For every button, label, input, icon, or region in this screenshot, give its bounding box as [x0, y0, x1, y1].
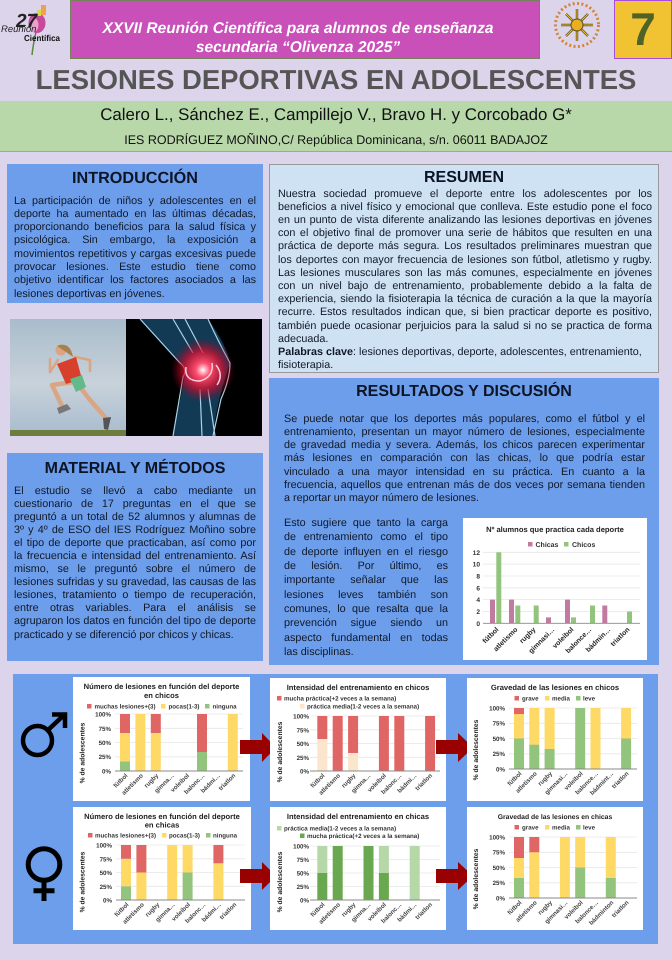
- bar chart: lesiones en chicas: en chicas: [145, 820, 179, 830]
- bar chart: intensidad en chicas: triatlon: [414, 901, 434, 921]
- bar chart: lesiones en chicos: pocas(1-3): [168, 704, 199, 710]
- bar chart: alumnos por deporte: atletismo: [492, 626, 519, 653]
- image: runner: [10, 319, 126, 436]
- bar chart: gravedad en chicos: bádmint…: [589, 770, 615, 797]
- bar chart: alumnos por deporte: Chicos: [572, 541, 595, 549]
- bar chart: lesiones en chicas: rugby: [144, 901, 162, 919]
- bar chart: intensidad en chicas: balonc…: [380, 901, 403, 925]
- bar chart: gravedad en chicas: bádminton: [588, 899, 615, 927]
- bar chart: gravedad en chicas: atletismo: [515, 899, 539, 924]
- bar chart: gravedad en chicas: 75%: [493, 850, 505, 856]
- bar chart: gravedad en chicos: triatlon: [611, 770, 631, 790]
- bar chart: gravedad en chicas: fútbol: [506, 899, 524, 917]
- bar chart: gravedad en chicas: % de adolescentes: [473, 848, 480, 909]
- bar chart: gravedad en chicos: balonce…: [574, 770, 600, 796]
- bar chart: alumnos por deporte: Chicas: [536, 541, 559, 549]
- text: adecuada.: [278, 333, 328, 345]
- text: vinculado a una mayor intensidad en su práctica. En cuanto a la: [284, 466, 645, 478]
- bar chart: intensidad en chicos: Intensidad del entrenamiento en chicos: [287, 683, 429, 692]
- bar chart: gravedad en chicas: 50%: [493, 865, 505, 872]
- bar chart: intensidad en chicos: fútbol: [309, 772, 327, 790]
- bar chart: gravedad en chicos: Gravedad de las lesiones en chicos: [491, 683, 619, 692]
- text: frecuencia, aquellos que entrenan más de dos veces por semana tienden: [284, 479, 645, 491]
- text: preguntó a un total de 52 alumnos y alumnas de: [14, 511, 256, 523]
- text: lesiones, tratamiento o tiempo de recuperación,: [14, 589, 256, 601]
- panel: introducción: [7, 164, 263, 303]
- header banner: secundaria “Olivenza 2025”: [196, 39, 400, 56]
- image: knee x-ray: [126, 319, 262, 436]
- bar chart: gravedad en chicas: leve: [583, 824, 596, 832]
- bar chart: lesiones en chicas: fútbol: [113, 901, 131, 919]
- bar chart: lesiones en chicos: gimna…: [153, 772, 176, 795]
- poster number: [614, 0, 672, 59]
- text: La participación de niños y adolescentes en el: [14, 195, 256, 207]
- bar chart: alumnos por deporte: voleibol: [551, 626, 575, 650]
- bar chart: lesiones en chicas: 100%: [96, 842, 112, 850]
- bar chart: intensidad en chicas: voleibol: [366, 901, 388, 923]
- bar chart: intensidad en chicas: % de adolescentes: [277, 851, 284, 912]
- text: de entrenamiento como el tipo: [284, 531, 448, 543]
- bar chart: lesiones en chicos: triatlon: [217, 772, 237, 792]
- text: más lesiones en comparación con las chicas, lo que podría estar: [284, 452, 645, 464]
- text: El estudio se llevó a cabo mediante un: [14, 485, 256, 497]
- bar chart: gravedad en chicos: leve: [583, 696, 596, 702]
- bar chart: gravedad en chicos: atletismo: [515, 770, 539, 795]
- arrow: [240, 862, 276, 890]
- text: objetivo identificar los factores asociados a las: [14, 274, 256, 286]
- bar chart: intensidad en chicas: gimna…: [350, 901, 372, 924]
- text: práctica de deporte más segura. Los resultados preliminares muestran que: [278, 240, 652, 252]
- text: [14, 485, 256, 641]
- bar chart: alumnos por deporte: [463, 518, 647, 660]
- bar chart: lesiones en chicas: [73, 807, 251, 930]
- bar chart: intensidad en chicos: rugby: [340, 772, 358, 790]
- bar chart: alumnos por deporte: 4: [476, 597, 480, 604]
- bar chart: gravedad en chicos: 50%: [493, 736, 505, 743]
- bar chart: lesiones en chicas: gimna…: [154, 901, 177, 924]
- text: [278, 188, 652, 371]
- bar chart: intensidad en chicos: 50%: [297, 741, 309, 748]
- panel: resumen: [269, 164, 659, 373]
- bar chart: lesiones en chicos: bádmi…: [200, 772, 222, 795]
- text: provocar lesiones. Este estudio tiene como: [14, 261, 256, 273]
- bar chart: intensidad en chicas: 75%: [297, 857, 309, 864]
- bar chart: gravedad en chicos: rugby: [537, 770, 554, 788]
- arrow: [436, 862, 473, 890]
- text: Esto sugiere que tanto la carga: [284, 517, 448, 529]
- text: también puede ocasionar perjuicios para la salud si no se practica de forma: [278, 320, 652, 332]
- authors: Calero L., Sánchez E., Campillejo V., Bravo H. y Corcobado G*: [100, 105, 572, 124]
- text: de deporte influyen en el riesgo: [284, 546, 448, 558]
- text: la frecuencia e intensidad del entrenamiento. Así: [14, 550, 256, 562]
- text: Nuestra sociedad promueve el deporte entre los adolescentes por los: [278, 188, 652, 200]
- bar chart: alumnos por deporte: 0: [476, 621, 480, 628]
- heading: MATERIAL Y MÉTODOS: [45, 460, 225, 477]
- authors band: [0, 101, 672, 152]
- bar chart: gravedad en chicos: 100%: [489, 706, 505, 712]
- bar chart: lesiones en chicas: balonc…: [184, 901, 207, 925]
- header banner: [70, 0, 540, 59]
- text: recurre. Estos resultados indican que, si bien practicar deporte es positivo,: [278, 306, 652, 318]
- bar chart: lesiones en chicos: fútbol: [112, 772, 130, 790]
- bar chart: intensidad en chicos: triatlon: [414, 772, 434, 792]
- bar chart: alumnos por deporte: triatlon: [609, 626, 631, 648]
- bar chart: intensidad en chicas: bádmi…: [396, 901, 418, 924]
- bar chart: lesiones en chicas: atletismo: [122, 901, 146, 926]
- icon: male symbol: [23, 714, 65, 755]
- logo: 27 Reunión Científica: Científica: [24, 33, 60, 43]
- text: [284, 413, 645, 504]
- bar chart: lesiones en chicas: 25%: [100, 884, 112, 891]
- bar chart: lesiones en chicos: [73, 677, 250, 801]
- bar chart: lesiones en chicos: 100%: [95, 712, 111, 718]
- text: de lesión. Por último, es: [284, 560, 448, 572]
- bar chart: gravedad en chicas: grave: [522, 824, 539, 832]
- text: los deportes con mayor frecuencia de lesiones son fútbol, atletismo y rugby.: [278, 254, 652, 266]
- text: Las lesiones musculares son las más comunes, especialmente en jóvenes: [278, 267, 652, 279]
- bar chart: lesiones en chicas: muchas lesiones+(3): [95, 832, 156, 840]
- text: Palabras clave: lesiones deportivas, deporte, adolescentes, entrenamiento,: [278, 346, 642, 358]
- bar chart: gravedad en chicas: voleibol: [563, 899, 585, 921]
- logo: sun emblem: [554, 2, 600, 48]
- text: proporcionando beneficios para la salud física y: [14, 221, 256, 233]
- bar chart: lesiones en chicos: 75%: [99, 726, 111, 733]
- bar chart: gravedad en chicos: grave: [522, 696, 539, 702]
- bar chart: intensidad en chicas: 25%: [297, 884, 309, 891]
- heading: INTRODUCCIÓN: [72, 169, 198, 187]
- bar chart: alumnos por deporte: rugby: [518, 626, 537, 645]
- bar chart: lesiones en chicos: % de adolescentes: [80, 722, 86, 783]
- arrow: [436, 733, 473, 762]
- bar chart: intensidad en chicos: 0%: [300, 768, 309, 776]
- text: movimientos repetitivos y cargas excesivas puede: [14, 248, 256, 260]
- bar chart: intensidad en chicas: 0%: [300, 898, 309, 904]
- bar chart: intensidad en chicas: atletismo: [318, 901, 342, 926]
- bar chart: lesiones en chicas: triatlon: [218, 901, 238, 921]
- bar chart: alumnos por deporte: fútbol: [481, 626, 500, 645]
- text: practicado y se diferenció por chicos y chicas.: [14, 629, 234, 641]
- panel: charts background: [13, 674, 658, 944]
- bar chart: alumnos por deporte: 10: [473, 562, 480, 568]
- text: [14, 195, 256, 300]
- bar chart: intensidad en chicas: [270, 807, 446, 930]
- bar chart: intensidad en chicos: gimna…: [350, 772, 372, 795]
- text: lesiones sufridas y su gravedad, las causas de las: [14, 576, 256, 588]
- text: de gravedad media y severa. Además, los chicos parecen experimentar: [284, 439, 645, 451]
- institution: IES RODRÍGUEZ MOÑINO,C/ República Dominicana, s/n. 06011 BADAJOZ: [124, 133, 548, 147]
- bar chart: intensidad en chicos: % de adolescentes: [277, 721, 284, 782]
- bar chart: gravedad en chicos: 25%: [493, 751, 505, 758]
- panel: material y métodos: [7, 453, 263, 661]
- text: en un punto de vista diferente analizando las lesiones deportivas en jóvenes: [278, 214, 652, 226]
- panel: resultados y discusión: [269, 378, 659, 665]
- bar chart: gravedad en chicos: 0%: [496, 766, 505, 774]
- bar chart: lesiones en chicos: rugby: [143, 772, 161, 790]
- bar chart: lesiones en chicas: 50%: [100, 870, 112, 877]
- text: lesiones leves también son: [284, 589, 448, 601]
- bar chart: gravedad en chicos: % de adolescentes: [473, 719, 480, 780]
- bar chart: lesiones en chicos: 25%: [99, 754, 111, 761]
- text: con el objetivo final de promover una serie de hábitos que resulten en una: [278, 227, 652, 239]
- logo: 27 Reunión Científica: [1, 5, 60, 56]
- bar chart: lesiones en chicos: ninguna: [212, 704, 237, 710]
- bar chart: lesiones en chicas: pocas(1-3): [169, 832, 200, 840]
- text: a reportar un mayor número de lesiones.: [284, 492, 479, 504]
- bar chart: gravedad en chicos: voleibol: [563, 770, 585, 792]
- bar chart: alumnos por deporte: bádmin…: [584, 626, 612, 654]
- bar chart: intensidad en chicas: 100%: [293, 844, 309, 850]
- bar chart: intensidad en chicas: 50%: [297, 870, 309, 878]
- bar chart: lesiones en chicas: bádmi…: [201, 901, 223, 924]
- bar chart: lesiones en chicos: en chicos: [144, 691, 179, 700]
- text: [284, 517, 448, 658]
- heading: RESUMEN: [424, 169, 504, 186]
- bar chart: intensidad en chicos: mucha práctica(+2 veces a la semana): [284, 696, 396, 702]
- text: las disciplinas.: [284, 646, 354, 658]
- bar chart: lesiones en chicos: 50%: [99, 740, 111, 747]
- heading: RESULTADOS Y DISCUSIÓN: [356, 383, 572, 400]
- bar chart: intensidad en chicos: balonc…: [380, 772, 403, 796]
- logo: 27 Reunión Científica: Reunión: [1, 24, 36, 35]
- text: comunes, lo que resalta que la: [284, 603, 448, 615]
- bar chart: alumnos por deporte: 12: [473, 550, 480, 557]
- bar chart: lesiones en chicas: % de adolescentes: [80, 851, 86, 912]
- bar chart: lesiones en chicos: muchas lesiones+(3): [94, 704, 156, 710]
- bar chart: intensidad en chicas: Intensidad del entrenamiento en chicas: [287, 812, 429, 821]
- bar chart: gravedad en chicos: media: [552, 696, 570, 702]
- arrow: [240, 733, 276, 762]
- text: beneficios a nivel físico y emocional que conlleva. Este estudio pone el foco: [278, 201, 652, 213]
- bar chart: intensidad en chicos: práctica media(1-2 veces a la semana): [307, 704, 419, 710]
- bar chart: gravedad en chicas: 0%: [496, 896, 505, 902]
- bar chart: intensidad en chicas: fútbol: [309, 901, 327, 919]
- bar chart: alumnos por deporte: 2: [476, 609, 480, 616]
- text: entrenamiento, presentan un mayor número de lesiones, especialmente: [284, 426, 645, 438]
- bar chart: alumnos por deporte: Nº alumnos que practica cada deporte: [486, 525, 624, 534]
- bar chart: lesiones en chicas: 0%: [103, 898, 112, 904]
- text: importante señalar que las: [284, 574, 448, 586]
- bar chart: intensidad en chicas: rugby: [340, 901, 358, 919]
- bar chart: lesiones en chicos: Número de lesiones en función del deporte: [84, 682, 239, 691]
- bar chart: gravedad en chicas: balonce…: [574, 899, 600, 925]
- text: psicológica. Sin embargo, la exposición a: [14, 234, 256, 246]
- bar chart: lesiones en chicos: 0%: [102, 768, 111, 776]
- bar chart: gravedad en chicas: rugby: [537, 899, 554, 917]
- bar chart: lesiones en chicas: 75%: [100, 856, 112, 864]
- bar chart: gravedad en chicas: 25%: [493, 880, 505, 887]
- text: mismo, se le preguntó sobre el número de: [14, 563, 256, 575]
- bar chart: gravedad en chicas: gimnasi…: [544, 899, 569, 925]
- bar chart: intensidad en chicos: atletismo: [318, 772, 342, 797]
- bar chart: gravedad en chicas: Gravedad de las lesiones en chicas: [498, 814, 612, 821]
- text: experiencia, siendo la fisioterapia la técnica de curación a la que la mayoría: [278, 293, 652, 305]
- bar chart: intensidad en chicos: 75%: [297, 728, 309, 734]
- header banner: XXVII Reunión Científica para alumnos de enseñanza: [102, 20, 494, 37]
- bar chart: alumnos por deporte: 8: [476, 574, 480, 580]
- text: Se puede notar que los deportes más populares, como el fútbol y el: [284, 413, 645, 425]
- bar chart: alumnos por deporte: balonce…: [564, 626, 593, 655]
- text: 3º y 4º de ESO del IES Rodríguez Moñino sobre: [14, 524, 256, 536]
- bar chart: intensidad en chicos: voleibol: [366, 772, 388, 794]
- bar chart: intensidad en chicas: práctica media(1-2 veces a la semana): [284, 826, 396, 832]
- bar chart: gravedad en chicos: fútbol: [506, 770, 524, 788]
- icon: female symbol: [28, 849, 60, 901]
- text: aspecto fundamental en todas: [284, 632, 448, 644]
- title: LESIONES DEPORTIVAS EN ADOLESCENTES: [36, 64, 636, 95]
- text: agruparon los datos en función del tipo de deporte: [14, 615, 256, 627]
- bar chart: gravedad en chicos: 75%: [493, 720, 505, 728]
- bar chart: lesiones en chicas: Número de lesiones en función del deporte: [84, 812, 240, 821]
- text: deporte ha aumentado en las últimas décadas,: [14, 208, 256, 220]
- bar chart: gravedad en chicas: 100%: [489, 834, 505, 842]
- bar chart: lesiones en chicos: balonc…: [183, 772, 206, 796]
- bar chart: gravedad en chicas: [467, 807, 643, 930]
- bar chart: intensidad en chicas: mucha práctica(+2 veces a la semana): [307, 833, 419, 840]
- bar chart: intensidad en chicos: [270, 678, 446, 801]
- bar chart: intensidad en chicos: bádmi…: [396, 772, 418, 795]
- bar chart: intensidad en chicos: 25%: [297, 755, 309, 762]
- bar chart: gravedad en chicas: media: [552, 824, 570, 832]
- bar chart: alumnos por deporte: gimnasi…: [527, 626, 556, 655]
- bar chart: alumnos por deporte: 6: [476, 586, 480, 592]
- text: con un nivel bajo de entrenamiento, probablemente debido a la falta de: [278, 280, 652, 292]
- bar chart: lesiones en chicos: atletismo: [121, 772, 145, 797]
- text: cuestionario de 17 preguntas en el que se: [14, 498, 256, 510]
- bar chart: gravedad en chicas: triatlon: [611, 899, 631, 919]
- logo: 27 Reunión Científica: 27: [15, 11, 39, 32]
- bar chart: gravedad en chicos: [467, 678, 643, 801]
- text: el tipo de deporte que practicaban, así como por: [14, 537, 256, 549]
- bar chart: gravedad en chicos: gimnasi…: [544, 770, 569, 796]
- text: lesiones deportivas en jóvenes.: [14, 288, 165, 300]
- text: entre otras variables. Para el análisis se: [14, 602, 256, 614]
- bar chart: lesiones en chicas: ninguna: [213, 832, 238, 840]
- text: fisioterapia.: [278, 359, 333, 371]
- bar chart: lesiones en chicas: voleibol: [171, 901, 192, 923]
- poster number: 7: [630, 3, 656, 55]
- text: prevención sigue siendo un: [284, 617, 448, 629]
- bar chart: lesiones en chicos: voleibol: [170, 772, 191, 794]
- bar chart: intensidad en chicos: 100%: [293, 714, 309, 720]
